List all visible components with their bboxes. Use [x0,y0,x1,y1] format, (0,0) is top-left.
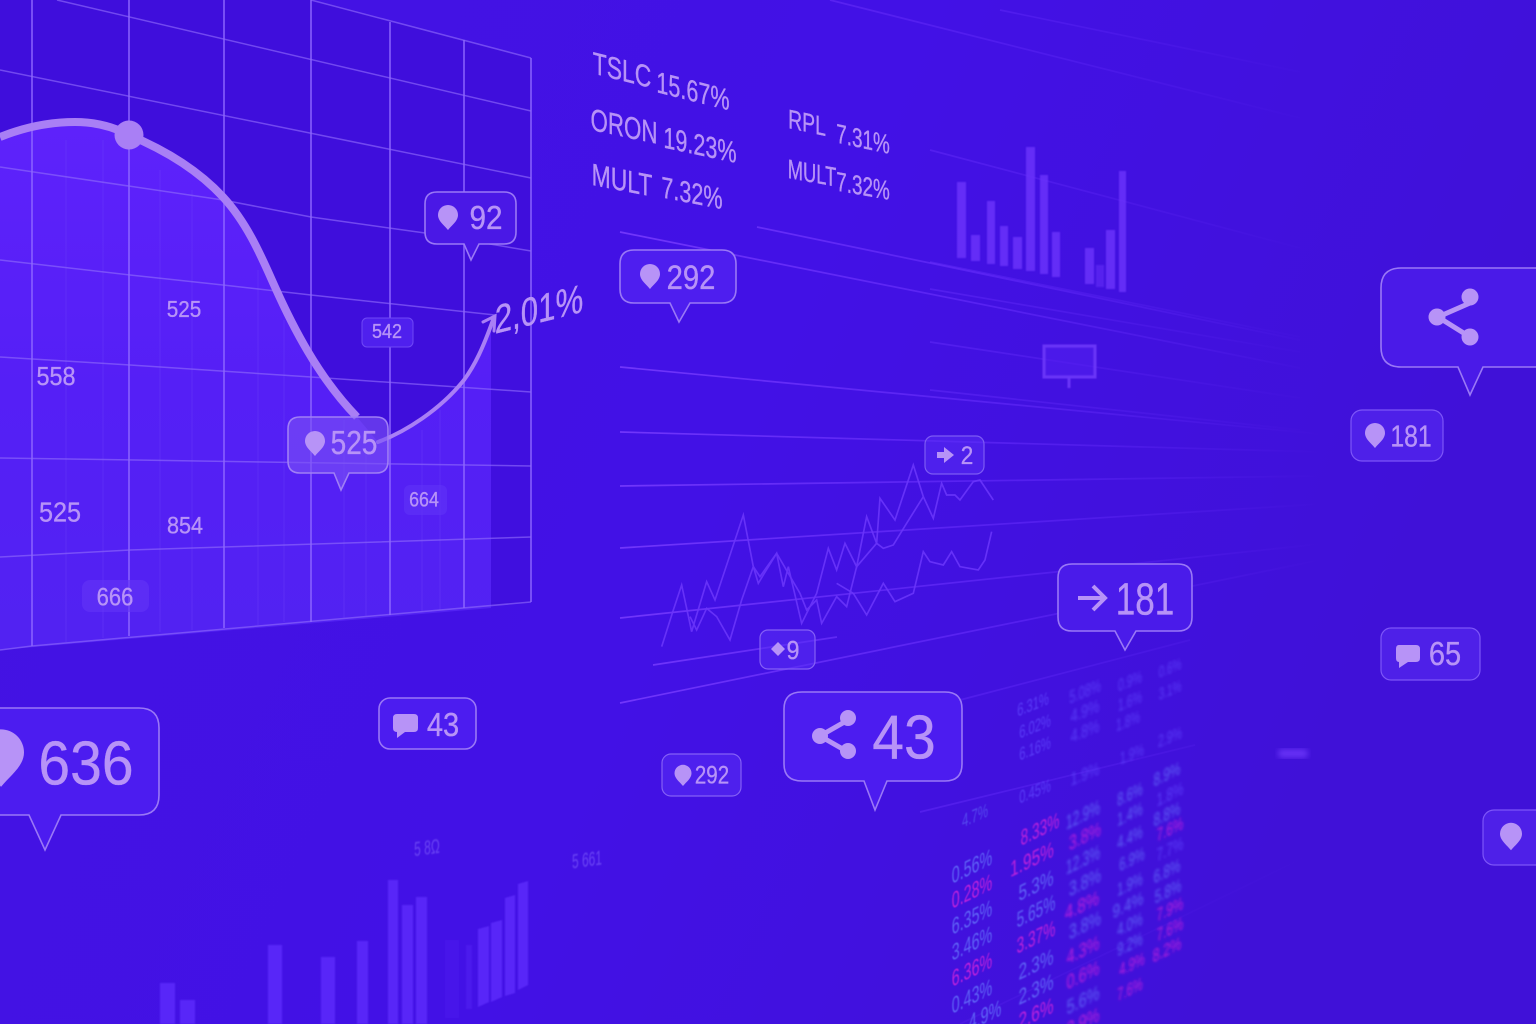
table column 3: 5.6% [1067,981,1099,1019]
bubble: 292 small: 292 [695,761,729,789]
table column 4: 1.4% [1117,799,1143,831]
table column 2: 2.3% [1018,969,1054,1011]
icon: share [1428,288,1478,346]
tag: 666 [82,580,149,612]
bubble: 92: 92 [469,200,503,236]
axis value: 525 [39,496,81,528]
table column 2: 3.37% [1017,916,1055,960]
table column 2: 0.45% [1019,776,1051,808]
table column 4: 6.9% [1119,844,1145,876]
axis value: 854 [167,511,203,539]
table column 5: 0.6% [1159,655,1181,681]
table column 3: 12.3% [1066,841,1100,879]
bubble: 92 [425,192,516,260]
tag: 664 [404,485,447,515]
bubble: 9 [760,630,815,669]
stock list: 7.31% [836,118,890,160]
stock list [591,45,890,216]
table column 4: 4.9% [1119,949,1145,981]
data table: bottom right [952,655,1183,1024]
tag: 666: 666 [97,583,133,611]
table column 4: 0.9% [1118,668,1142,696]
table column 4: 1.6% [1118,688,1142,716]
table column 4: 4.0% [1117,909,1143,941]
table column 5: 7.9% [1157,894,1183,926]
table column 2: 8.33% [1021,808,1059,852]
table column 4: 9.4% [1113,887,1144,923]
table column 5: 3.1% [1159,677,1181,703]
table column 3: 5.08% [1069,676,1101,708]
bubble: 65 [1381,628,1480,680]
table column 1: 0.43% [952,974,992,1020]
bubble: 292 small [662,754,741,796]
table column 5 [1153,655,1183,967]
table column 4: 4.4% [1117,822,1143,854]
bubble: 65: 65 [1429,635,1461,673]
table column 1: 0.56% [952,844,992,890]
table column 4: 1.9% [1117,869,1143,901]
curve line [0,122,357,417]
table column 4: 7.6% [1117,974,1143,1006]
axis value: 525 [167,296,201,322]
stock list: 19.23% [663,120,737,170]
table column 4: 1.8% [1116,708,1140,736]
bubble: 43 comment [379,698,476,749]
table column 3 [1065,676,1101,1024]
table column 5: 7.6% [1157,914,1183,946]
bubble: share right [1381,268,1536,395]
table column 5: 5.8% [1155,876,1181,908]
table column 5: 2.9% [1158,724,1182,752]
chart area fill [0,122,491,650]
tag: 542: 542 [372,321,402,343]
table column 2: 6.31% [1017,689,1049,721]
bubble: 43 comment: 43 [427,706,459,744]
stock list: MULT [592,157,653,203]
bubble: 525: 525 [331,425,377,461]
table column 2: 6.02% [1019,711,1051,743]
tag: 664: 664 [409,488,439,512]
table column 1 [952,800,1001,1024]
table column 4: 8.6% [1117,779,1143,811]
screen icon [1044,346,1095,388]
table column 5: 8.2% [1153,933,1181,967]
stock list: 7.32% [836,166,890,206]
panel: line chart with perspective grid [0,0,583,650]
table column 2: 5.3% [1018,865,1054,907]
stock list: 7.32% [661,170,723,216]
table column 3: 3.8% [1069,906,1101,944]
bar chart: bottom left [160,880,528,1024]
table column 4 [1113,668,1145,1006]
stock list: ORON [591,101,657,151]
bubble: 292 [620,250,736,322]
bubble: 636: 636 [38,728,134,798]
table column 2: 6.16% [1019,733,1051,765]
table column 1: 6.35% [952,895,992,941]
table column 3: 4.8% [1065,885,1099,925]
bubble: pin right [1483,810,1536,865]
table column 3: 3.8% [1069,863,1101,901]
table column 1: 6.36% [952,947,992,993]
stock list: TSLC [593,45,651,95]
bubble: 43 share [784,692,962,810]
icon: arrow [1078,586,1105,610]
bubble: 636 [0,708,159,850]
bubble: 43 share: 43 [872,702,936,772]
stock list: 15.67% [656,65,730,117]
table column 5: 8.8% [1154,799,1180,831]
table column 4: 9.2% [1117,929,1143,961]
table column 3: 12.9% [1066,796,1100,834]
stock list: MULT [788,154,836,192]
bubble: 181 arrow: 181 [1116,573,1174,625]
table column 2: 2.3% [1018,944,1054,986]
bubble: 181 [1351,410,1443,461]
table column 3: 4.8% [1071,717,1099,747]
faint chart label: 5 8Ω [414,835,440,861]
axis value: 558 [36,363,76,391]
table column 1: 3.46% [952,921,992,967]
table column 5: 7.7% [1157,834,1183,866]
bubble: 2: 2 [961,442,973,470]
curve node [114,120,144,150]
bubble: 181: 181 [1390,419,1432,453]
table column 3: 4.3% [1067,931,1099,969]
table column 5: 1.8% [1157,779,1183,811]
growth arrow [378,316,495,442]
line chart: center [662,465,993,647]
bubble: 292: 292 [667,258,715,296]
bubble: 525 [288,417,388,490]
faint chart label: 5 661 [572,846,602,874]
growth value: 2,01% [495,275,583,343]
table column 4: 1.9% [1120,741,1144,769]
bar chart: top right [957,147,1126,292]
icon: share [812,710,856,759]
bubble: 9: 9 [786,637,800,665]
bubble: 181 arrow [1058,564,1192,650]
table column 3: 4.9% [1071,697,1099,727]
table column 1: 0.28% [952,869,992,915]
table column 2: 5.65% [1017,890,1055,934]
icon: chat [393,714,418,738]
icon: chat [1396,645,1420,668]
table column 3: 0.6% [1067,956,1099,994]
tag: 542 [362,318,413,347]
table column 5: 8.9% [1154,759,1180,791]
bubble: 2 [925,436,984,474]
table column 3: 3.8% [1069,817,1101,855]
table column 5: 6.8% [1154,856,1180,888]
table column 1: 4.7% [962,800,988,832]
stock list: RPL [788,105,826,143]
table column 2 [1010,689,1059,1024]
table column 3: 1.9% [1071,760,1099,790]
blurred glow [1278,749,1308,758]
table column 2: 1.95% [1010,837,1054,883]
table column 5: 7.6% [1157,814,1183,846]
